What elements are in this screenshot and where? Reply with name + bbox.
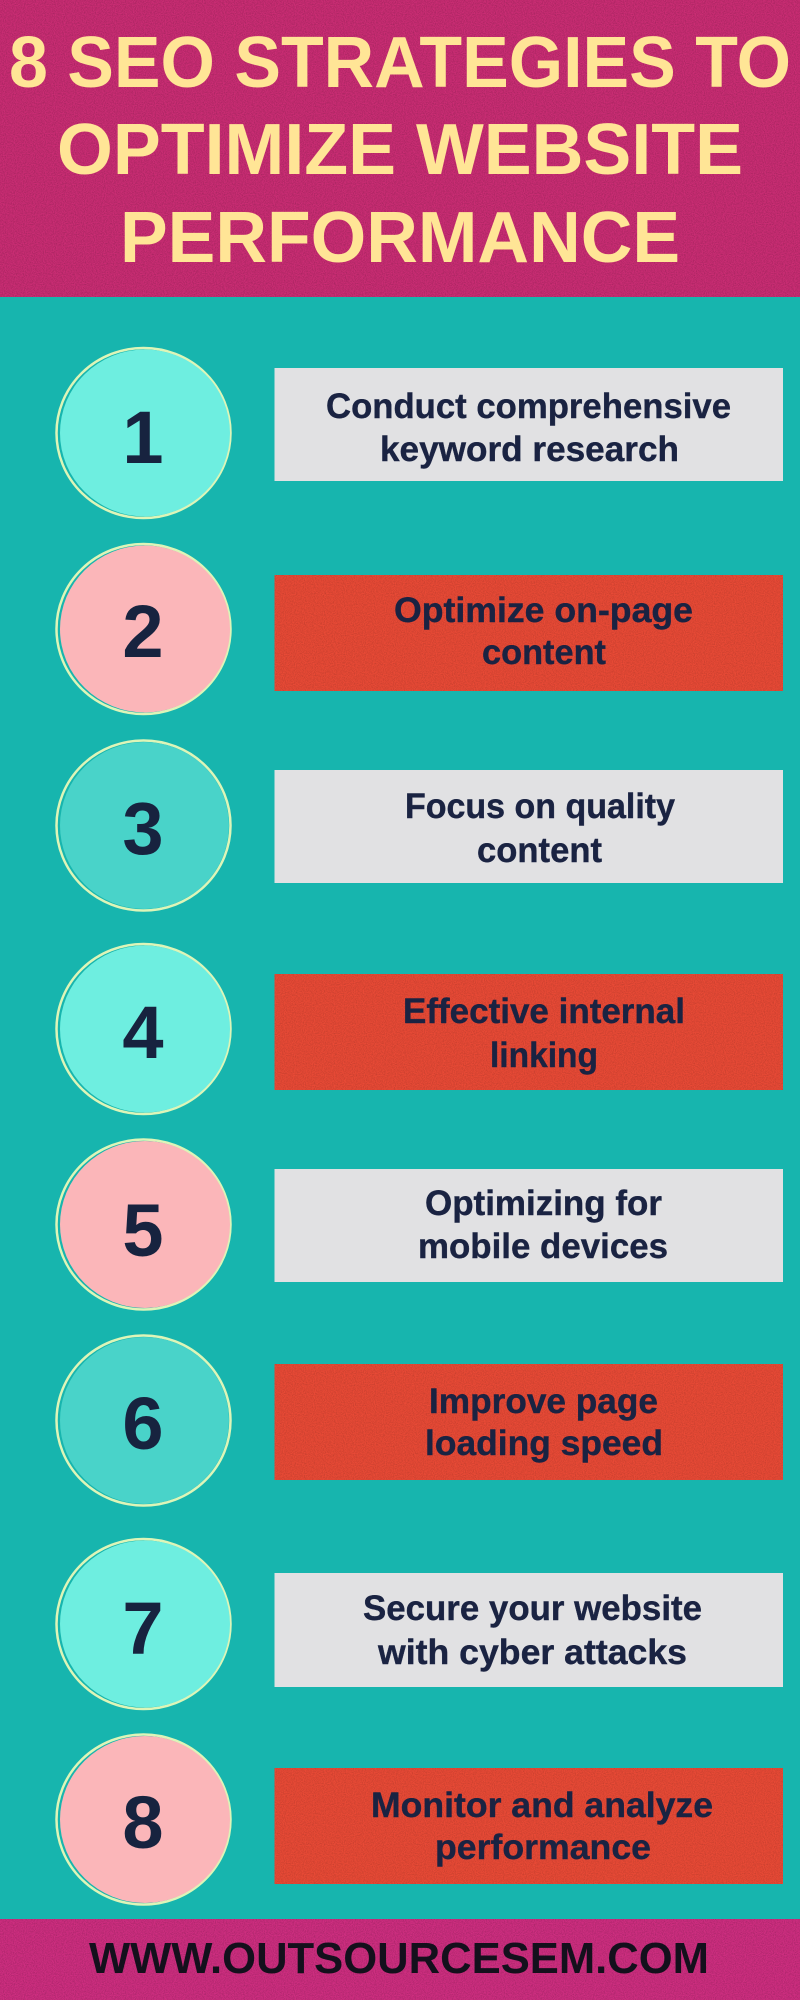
number badge 1: 1 [122, 396, 164, 479]
step 4 [56, 944, 783, 1114]
card 8: performance [435, 1828, 651, 1867]
number badge 2 [56, 544, 230, 714]
card 1: Conduct comprehensive [326, 387, 731, 426]
card 6: Improve page [429, 1382, 658, 1421]
card 8: Monitor and analyze [371, 1786, 713, 1825]
card 8 [274, 1768, 783, 1884]
number badge 6 [56, 1336, 230, 1506]
card 3: content [477, 831, 602, 870]
step 6 [56, 1336, 783, 1506]
card 1: keyword research [380, 430, 679, 469]
card 5: Optimizing for [425, 1184, 662, 1223]
number badge 3 [56, 740, 230, 910]
number badge 2: 2 [122, 590, 164, 673]
step 2 [56, 544, 783, 714]
number badge 4: 4 [122, 991, 164, 1074]
number badge 8: 8 [122, 1781, 164, 1864]
number badge 5 [56, 1140, 230, 1310]
step 3 [56, 740, 783, 910]
card 6 [274, 1364, 783, 1480]
title: OPTIMIZE WEBSITE [57, 110, 743, 190]
number badge 4 [56, 944, 230, 1114]
number badge 5: 5 [122, 1189, 164, 1272]
card 4 [274, 974, 783, 1090]
number badge 6: 6 [122, 1382, 164, 1465]
title: 8 SEO STRATEGIES TO [9, 23, 791, 103]
card 2 [274, 575, 783, 691]
number badge 8 [56, 1734, 230, 1904]
step 1 [56, 348, 783, 518]
step 8 [56, 1734, 783, 1904]
number badge 3: 3 [122, 787, 164, 870]
card 6: loading speed [425, 1424, 663, 1463]
card 2: content [482, 633, 606, 672]
card 7 [274, 1573, 783, 1687]
card 5: mobile devices [418, 1227, 668, 1266]
card 3: Focus on quality [405, 787, 676, 826]
title: PERFORMANCE [120, 198, 680, 278]
step 7 [56, 1539, 783, 1709]
card 4: Effective internal [403, 992, 685, 1031]
card 3 [274, 770, 783, 883]
card 1 [274, 368, 783, 481]
card 4: linking [490, 1036, 598, 1075]
step 5 [56, 1140, 783, 1310]
card 5 [274, 1169, 783, 1282]
card 7: Secure your website [363, 1589, 702, 1628]
panel: header banner [0, 0, 800, 297]
number badge 1 [56, 348, 230, 518]
footer website url: WWW.OUTSOURCESEM.COM [89, 1934, 709, 1983]
panel: footer banner [0, 1919, 800, 2000]
card 2: Optimize on-page [394, 591, 693, 630]
card 7: with cyber attacks [377, 1633, 687, 1672]
number badge 7: 7 [122, 1587, 164, 1670]
number badge 7 [56, 1539, 230, 1709]
title [9, 23, 791, 278]
